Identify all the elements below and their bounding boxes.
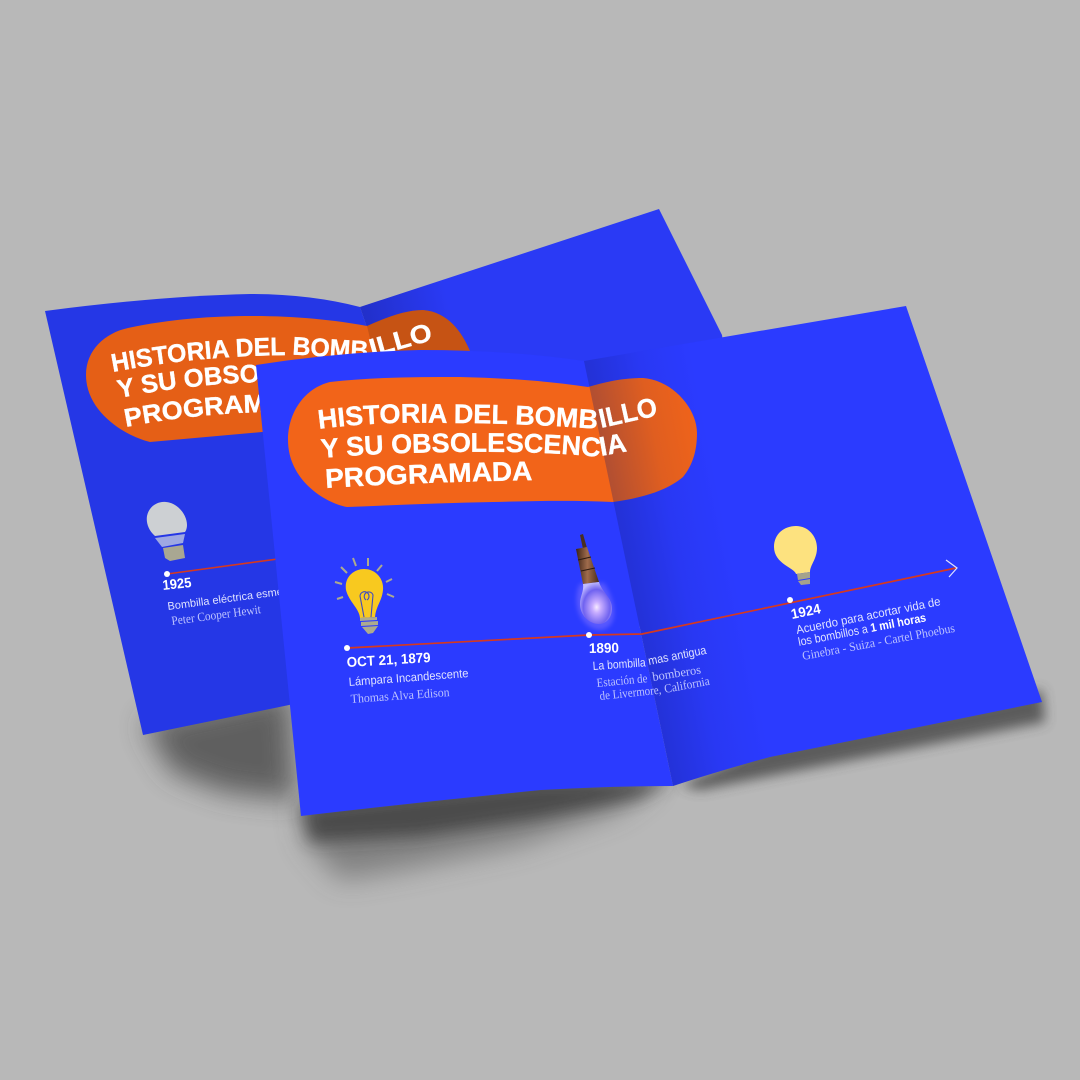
title: ILLO	[598, 398, 656, 428]
front page left	[256, 350, 673, 816]
back title: ILLO	[368, 324, 431, 352]
entry: 1890: California	[663, 674, 711, 696]
icon: glowing antique bulb	[576, 534, 614, 630]
back title: HISTORIA DEL BOMB	[111, 336, 367, 372]
entry: 1924: los bombillos a 1 mil horas	[797, 610, 927, 649]
shadow: front brochure right edge	[680, 690, 1045, 790]
back title pill	[86, 310, 480, 442]
title: PROGRAMADA	[326, 462, 532, 488]
title: Y SU OBSOLESCENC	[320, 432, 600, 458]
entry: 1924: Ginebra - Suiza - Cartel Phoebus	[801, 621, 956, 663]
entry: Oct 21, 1879	[346, 649, 469, 706]
timeline with arrow	[344, 560, 957, 651]
shadow: back brochure	[143, 690, 296, 800]
entry: 1890: 1890	[589, 639, 619, 656]
entry: 1924: Acuerdo para acortar vida de	[795, 594, 942, 637]
1925 entry: Peter Cooper Hewit	[171, 602, 262, 628]
title: IA	[599, 434, 628, 456]
shadow: front brochure wide	[301, 775, 660, 880]
back fold shading	[360, 209, 760, 660]
title: HISTORIA DEL BOMB	[318, 404, 597, 429]
entry: 1890: bomberos	[651, 662, 702, 684]
icon: yellow filament bulb	[335, 558, 394, 634]
shadow: front brochure contact	[301, 780, 673, 842]
front brochure	[256, 306, 1042, 816]
entry: 1890: La bombilla	[592, 655, 646, 673]
entry: 1890	[589, 639, 711, 703]
icon: pale yellow bulb	[774, 526, 817, 585]
back page left	[45, 294, 480, 735]
entry: Oct 21, 1879: OCT 21, 1879	[346, 649, 431, 670]
back timeline	[164, 556, 300, 577]
entry: 1890: de Livermore,	[599, 683, 662, 703]
entry: 1890: Estación de	[596, 671, 648, 690]
front fold shading	[584, 306, 1042, 786]
entry: 1924: 1924	[789, 600, 822, 622]
title pill	[288, 377, 697, 507]
entry: 1890: mas antigua	[647, 643, 708, 668]
entry: 1924	[789, 594, 956, 663]
icon: grey LED bulb	[147, 502, 187, 561]
entry: Oct 21, 1879: Lámpara Incandescente	[348, 666, 469, 689]
back page right	[360, 209, 760, 660]
back title	[111, 324, 431, 427]
front page right	[584, 306, 1042, 786]
back brochure	[45, 209, 722, 735]
1925 entry: 1925	[162, 574, 192, 593]
entry: Oct 21, 1879: Thomas Alva Edison	[350, 685, 451, 706]
1925 entry: Bombilla eléctrica esmeralda	[167, 583, 309, 613]
1925 entry	[162, 574, 309, 628]
title	[318, 398, 656, 488]
